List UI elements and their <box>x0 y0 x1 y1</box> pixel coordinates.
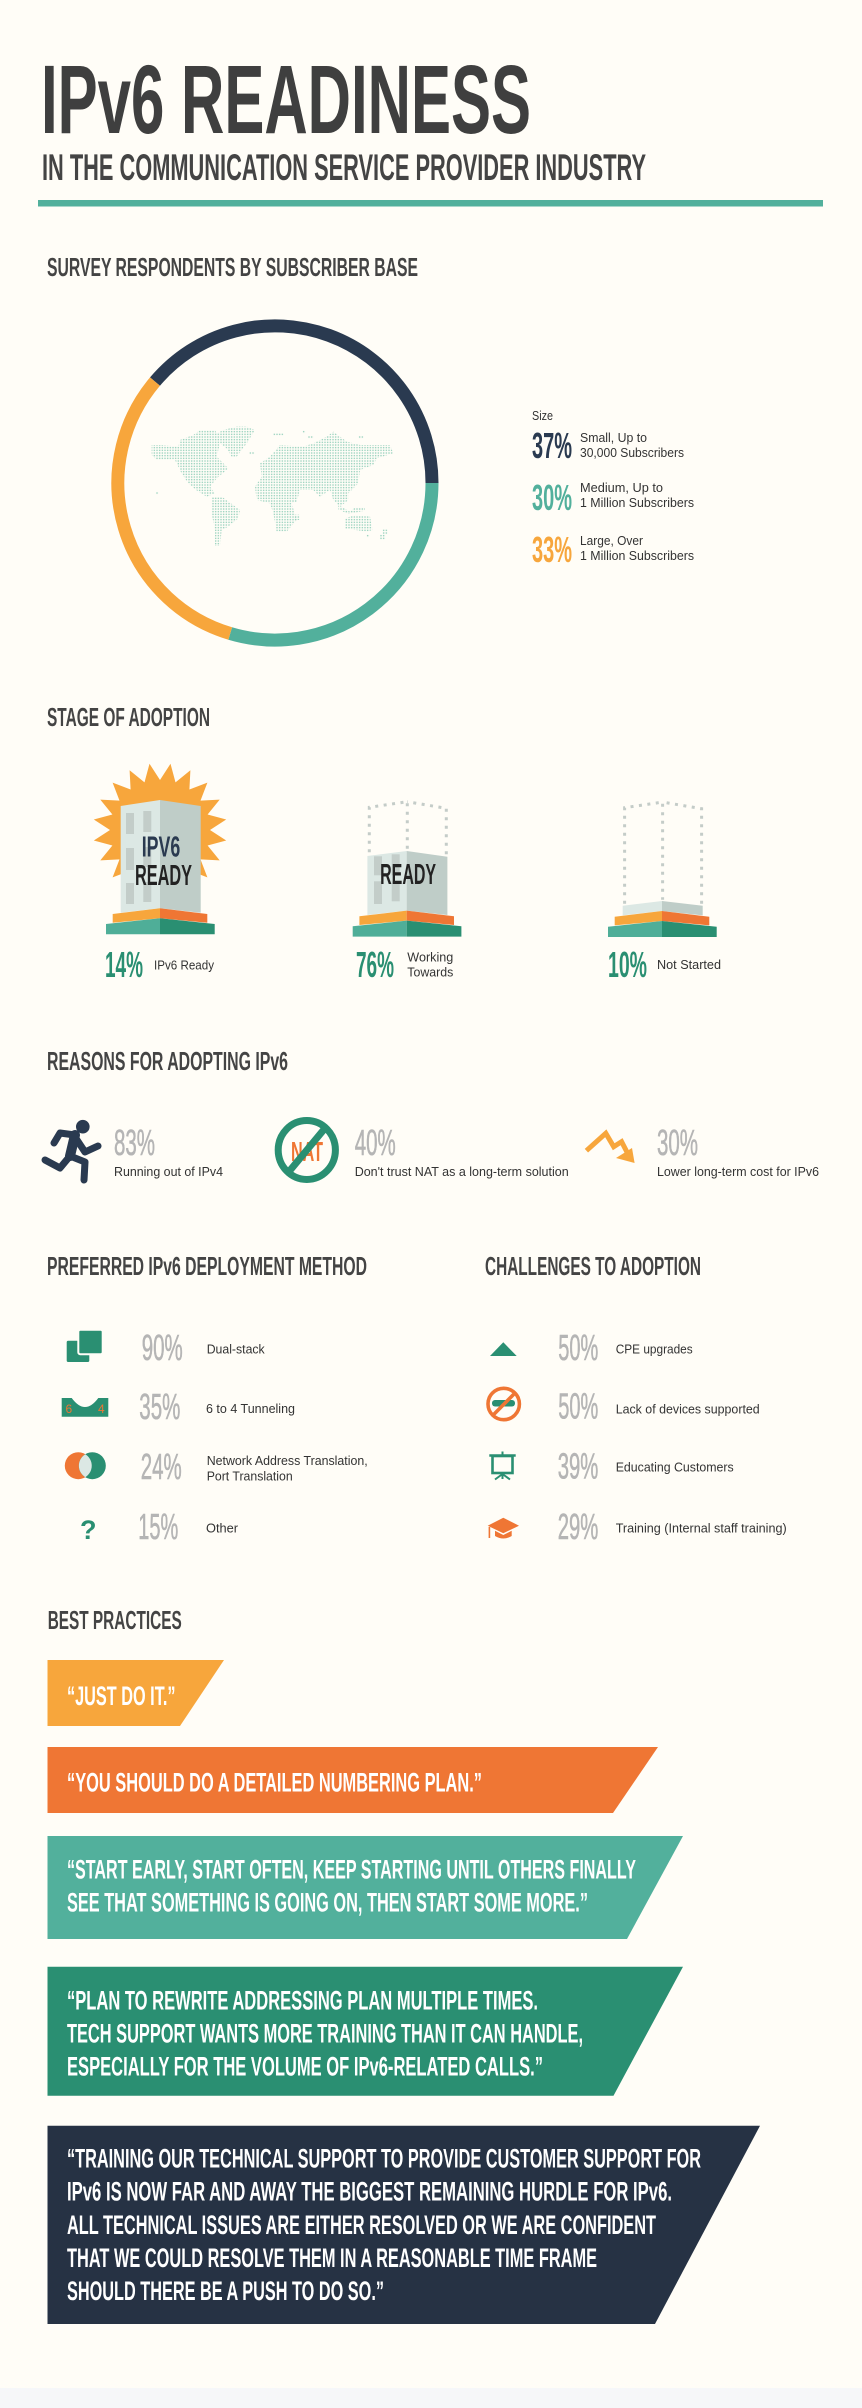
legend: Size <box>532 408 553 423</box>
stat: 10% not started: 10% <box>608 944 647 985</box>
legend <box>532 408 694 570</box>
row: network address translation: Network Address Translation, <box>207 1453 368 1468</box>
stat: 76% working towards: 76% <box>356 944 394 985</box>
stat: 14% IPv6 ready: 14% <box>105 944 143 985</box>
row: educating customers: 39% <box>558 1445 598 1486</box>
legend item: 33% <box>532 529 694 570</box>
quote banner 4: “PLAN TO REWRITE ADDRESSING PLAN MULTIPLE TIMES. <box>67 1985 538 2015</box>
row: training <box>488 1506 787 1547</box>
quote banner 4 <box>48 1967 683 2096</box>
row: dual-stack <box>67 1327 265 1368</box>
row: CPE upgrades <box>490 1327 693 1368</box>
row: lack of devices: Lack of devices supported <box>616 1401 760 1416</box>
legend item: 37%: 37% <box>532 425 572 466</box>
icon: runner <box>45 1120 98 1180</box>
stat: 30% <box>657 1122 819 1179</box>
heading: deployment method: PREFERRED IPv6 DEPLOYMENT METHOD <box>47 1251 367 1281</box>
stat: 83% <box>114 1122 223 1179</box>
world dot map <box>152 427 393 546</box>
legend item: 37%: Small, Up to <box>580 430 647 445</box>
row: 6 to 4 tunneling: 6 to 4 Tunneling <box>206 1401 295 1416</box>
stat: 14% IPv6 ready <box>105 944 214 985</box>
row: educating customers <box>489 1445 734 1486</box>
row: other: Other <box>206 1520 239 1535</box>
row: network address translation: Port Translation <box>207 1469 293 1484</box>
icon: no NAT <box>278 1120 335 1180</box>
building: IPv6 ready <box>94 764 226 934</box>
row: lack of devices <box>488 1385 760 1426</box>
row: other: 15% <box>138 1506 178 1547</box>
building: working towards: READY <box>380 859 436 891</box>
title rule <box>38 200 823 206</box>
legend item: 30%: 30% <box>532 477 572 518</box>
panel: deployment method <box>47 1251 368 1547</box>
legend item: 37% <box>532 425 684 466</box>
row: training: 29% <box>558 1506 598 1547</box>
row: educating customers: Educating Customers <box>616 1460 734 1475</box>
row: 6 to 4 tunneling: 35% <box>139 1386 180 1427</box>
row: CPE upgrades: 50% <box>558 1327 598 1368</box>
panel: reasons for adopting <box>45 1046 819 1180</box>
legend item: 30%: 1 Million Subscribers <box>580 495 694 510</box>
row: 6 to 4 tunneling: 4 <box>98 1402 105 1416</box>
quote banner 5 <box>48 2126 760 2324</box>
donut chart <box>118 326 432 640</box>
stat: 83%: Running out of IPv4 <box>114 1164 223 1179</box>
quote banner 2 <box>48 1747 658 1813</box>
row: dual-stack: Dual-stack <box>207 1341 265 1356</box>
building: IPv6 ready: IPV6 <box>142 832 180 864</box>
stat: 40%: Don't trust NAT as a long-term solution <box>355 1164 569 1179</box>
quote banner 1 <box>48 1660 224 1726</box>
icon: no NAT: NAT <box>291 1136 323 1167</box>
heading: stage of adoption: STAGE OF ADOPTION <box>47 702 210 732</box>
legend item: 33%: 33% <box>532 529 572 570</box>
row: network address translation <box>65 1446 368 1487</box>
panel: best practices <box>48 1605 760 2324</box>
stat: 83%: 83% <box>114 1122 155 1163</box>
heading: reasons: REASONS FOR ADOPTING IPv6 <box>47 1046 288 1076</box>
building: IPv6 ready: READY <box>135 860 192 892</box>
stat: 10% not started <box>608 944 721 985</box>
quote banner 1: “JUST DO IT.” <box>67 1681 176 1711</box>
stat: 30%: 30% <box>657 1122 698 1163</box>
stat: 40%: 40% <box>355 1122 396 1163</box>
title: IPv6 READINESS <box>41 45 531 154</box>
quote banner 2: “YOU SHOULD DO A DETAILED NUMBERING PLAN.” <box>67 1768 482 1798</box>
row: network address translation: 24% <box>141 1446 182 1487</box>
legend item: 33%: Large, Over <box>580 533 644 548</box>
row: dual-stack: 90% <box>142 1327 183 1368</box>
stat: 14% IPv6 ready: IPv6 Ready <box>154 957 214 972</box>
row: CPE upgrades: CPE upgrades <box>616 1341 693 1356</box>
row: lack of devices: 50% <box>558 1385 598 1426</box>
stat: 30%: Lower long-term cost for IPv6 <box>657 1164 819 1179</box>
row: training: Training (Internal staff training) <box>616 1520 787 1535</box>
quote banner 4: ESPECIALLY FOR THE VOLUME OF IPv6-RELATED CALLS.” <box>67 2051 543 2081</box>
stat: 10% not started: Not Started <box>657 957 721 972</box>
legend item: 37%: 30,000 Subscribers <box>580 445 684 460</box>
heading: survey respondents: SURVEY RESPONDENTS BY SUBSCRIBER BASE <box>47 252 418 282</box>
building: working towards <box>353 802 461 937</box>
stat: 76% working towards: Working <box>407 950 453 965</box>
building: not started <box>608 802 717 937</box>
heading: challenges: CHALLENGES TO ADOPTION <box>485 1251 701 1281</box>
quote banner 3 <box>48 1836 683 1939</box>
panel: survey respondents <box>47 252 694 640</box>
icon: downward arrow <box>586 1133 635 1163</box>
row: other: ? <box>80 1515 96 1545</box>
panel: stage of adoption <box>47 702 721 985</box>
stat: 76% working towards: Towards <box>407 965 454 980</box>
panel: challenges <box>485 1251 787 1547</box>
legend item: 30%: Medium, Up to <box>580 480 663 495</box>
stat: 40% <box>355 1122 569 1179</box>
row: other <box>80 1506 239 1547</box>
legend item: 33%: 1 Million Subscribers <box>580 548 694 563</box>
quote banner 5: SHOULD THERE BE A PUSH TO DO SO.” <box>67 2276 384 2306</box>
legend item: 30% <box>532 477 694 518</box>
row: 6 to 4 tunneling: 6 <box>66 1402 72 1416</box>
heading: best practices: BEST PRACTICES <box>48 1605 182 1635</box>
row: 6 to 4 tunneling <box>62 1386 295 1427</box>
